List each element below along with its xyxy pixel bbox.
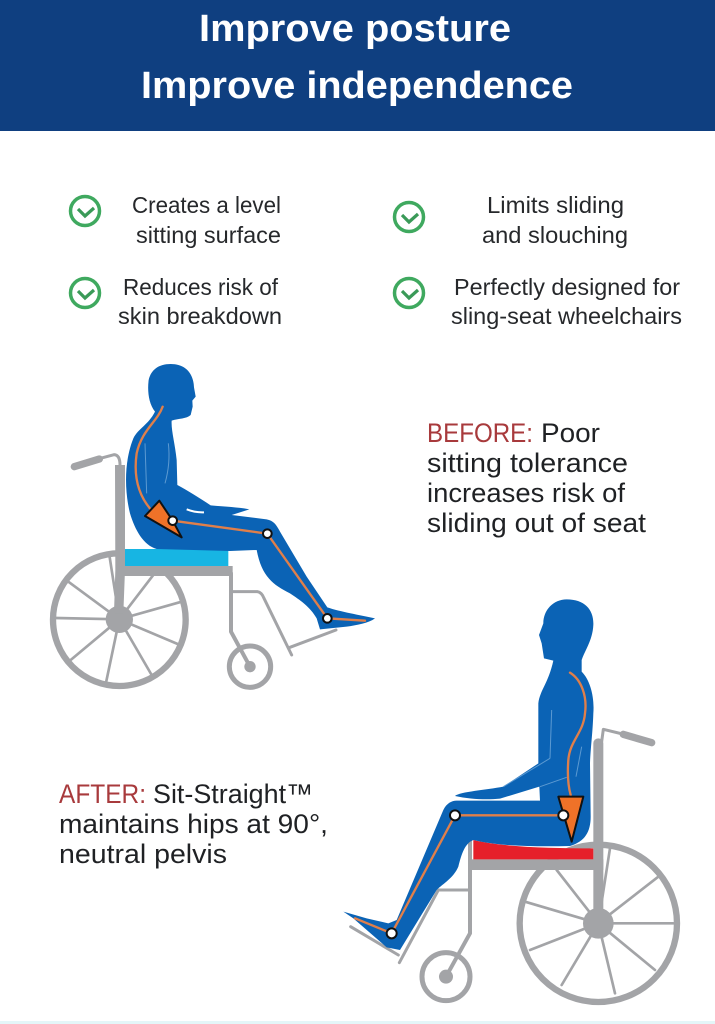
benefits list (70, 192, 682, 329)
body contour lines (503, 710, 582, 787)
cushion (473, 840, 593, 859)
title: Improve independence (141, 65, 573, 107)
benefit: level surface: Creates a level (132, 192, 281, 218)
benefit: skin breakdown: skin breakdown (118, 303, 282, 329)
after caption: neutral pelvis (59, 839, 227, 869)
benefit: sling-seat: sling-seat wheelchairs (451, 303, 682, 329)
before caption: Poor (541, 418, 600, 448)
after caption: AFTER: (59, 779, 146, 809)
before caption: BEFORE: (427, 418, 533, 448)
pelvis wedge (558, 797, 583, 842)
arm gap and body contour lines (145, 443, 204, 512)
spine and leg bones (136, 407, 365, 621)
title: Improve posture (199, 8, 511, 50)
benefit: limits sliding (394, 192, 628, 248)
benefit: skin breakdown (70, 274, 282, 329)
benefit: level surface: sitting surface (136, 222, 281, 248)
wheelchair (53, 455, 336, 687)
benefit: sling-seat: Perfectly designed for (454, 274, 680, 300)
benefit: limits sliding: Limits sliding (487, 192, 624, 218)
header banner (0, 0, 715, 131)
before caption: increases risk of (427, 478, 625, 508)
after caption: Sit-Straight™ (153, 779, 313, 809)
before caption (427, 418, 647, 538)
wheelchair (351, 729, 677, 1002)
benefit: skin breakdown: Reduces risk of (123, 274, 279, 300)
before illustration: slouched figure in wheelchair (53, 364, 375, 687)
body (343, 599, 594, 950)
joints (387, 810, 568, 938)
before caption: sitting tolerance (427, 448, 628, 478)
benefit: level surface (70, 192, 281, 248)
joints (168, 516, 332, 623)
title (141, 8, 573, 107)
after caption (59, 779, 328, 869)
after illustration: upright figure in wheelchair (343, 599, 677, 1002)
spine and leg bones (355, 673, 586, 933)
benefit: limits sliding: and slouching (482, 222, 628, 248)
before caption: sliding out of seat (427, 508, 647, 538)
body (126, 364, 375, 629)
cushion (125, 549, 228, 566)
pelvis wedge (145, 501, 182, 537)
benefit: sling-seat (394, 274, 682, 329)
after caption: maintains hips at 90°, (59, 809, 328, 839)
